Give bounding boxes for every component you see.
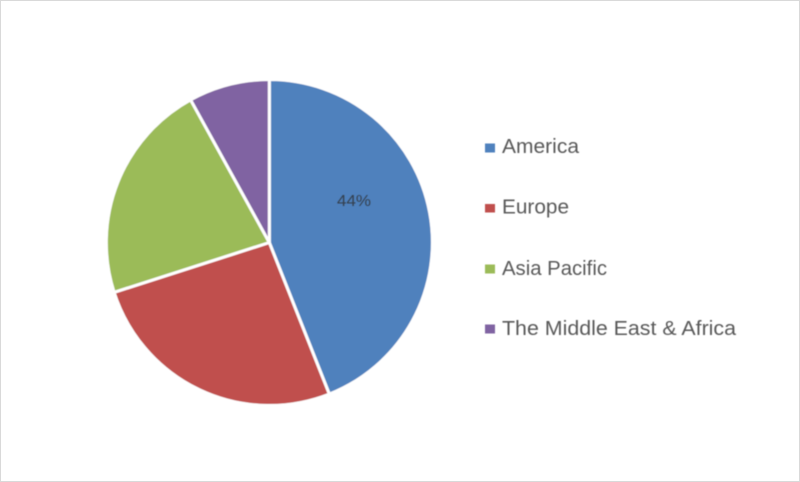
slice: Europe xyxy=(114,242,329,406)
pie chart xyxy=(106,79,432,406)
slice: The Middle East & Africa xyxy=(191,80,269,242)
legend xyxy=(485,136,737,340)
data label: 44%: 44% xyxy=(337,193,371,210)
legend item: The Middle East & Africa: The Middle East & Africa xyxy=(502,318,737,340)
slice: America xyxy=(269,79,432,394)
legend item: Europe: Europe xyxy=(502,196,569,218)
legend item: Asia Pacific: Asia Pacific xyxy=(502,258,607,280)
slice: Asia Pacific xyxy=(106,100,269,292)
legend item: America: America xyxy=(502,136,580,158)
